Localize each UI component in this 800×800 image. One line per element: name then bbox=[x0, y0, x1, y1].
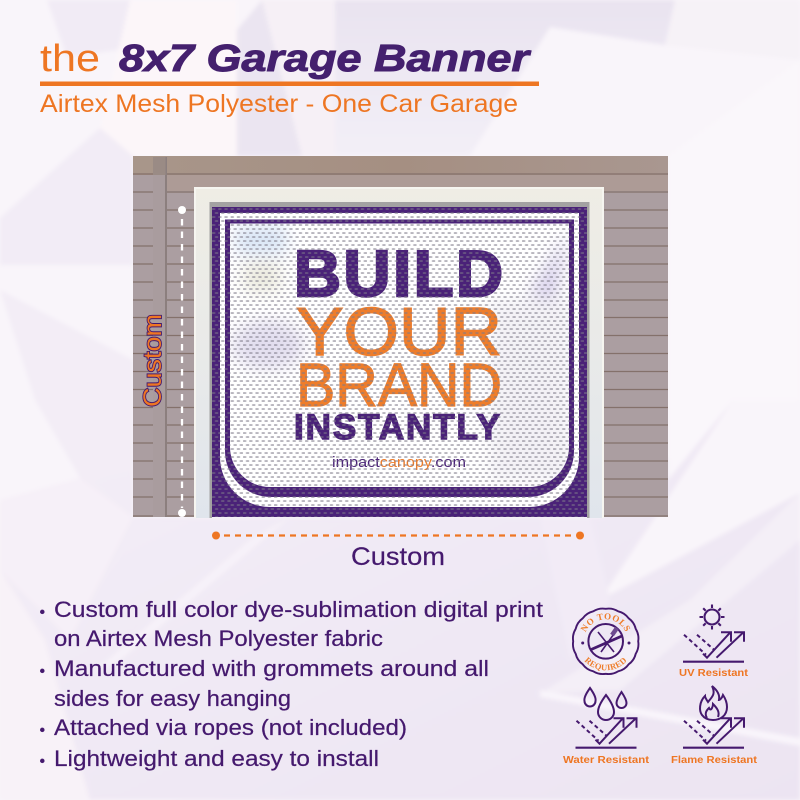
feature bullet list: Attached via ropes (not included) bbox=[54, 715, 407, 740]
title: 8x7 Garage Banner bbox=[119, 38, 532, 80]
feature bullet list: • bbox=[40, 722, 45, 739]
title rule bbox=[40, 82, 539, 86]
icon: no tools required badge: REQUIRED bbox=[584, 656, 626, 671]
faint photo behind mesh bbox=[232, 226, 570, 480]
mesh perforations bbox=[212, 207, 587, 517]
width dimension: Custom bbox=[212, 532, 584, 571]
width dimension: Custom: Custom bbox=[351, 543, 445, 571]
banner text: BRAND bbox=[296, 351, 502, 419]
banner text: BUILD bbox=[294, 237, 503, 310]
icon: flame resistant bbox=[671, 686, 758, 766]
garage photo bbox=[133, 156, 668, 518]
feature bullet list: Custom full color dye-sublimation digital print bbox=[54, 597, 543, 622]
white panel bbox=[230, 224, 569, 487]
icon: UV resistant bbox=[679, 604, 749, 679]
purple inner border bbox=[225, 220, 574, 497]
title: the bbox=[40, 38, 100, 80]
subtitle: Airtex Mesh Polyester - One Car Garage bbox=[40, 90, 518, 118]
feature bullet list: • bbox=[40, 604, 45, 621]
icon: water resistant: Water Resistant bbox=[563, 754, 650, 766]
feature bullet list: on Airtex Mesh Polyester fabric bbox=[54, 626, 383, 651]
mesh banner bbox=[212, 207, 587, 517]
banner text: impactcanopy .com bbox=[332, 454, 466, 471]
height dimension: Custom bbox=[139, 206, 186, 517]
downpipe bbox=[153, 157, 166, 517]
feature bullet list: Manufactured with grommets around all bbox=[54, 656, 489, 681]
water drops bbox=[584, 688, 626, 720]
feature bullet list: sides for easy hanging bbox=[54, 686, 291, 711]
door shadow bbox=[210, 202, 590, 518]
height dimension: Custom: Custom bbox=[139, 314, 167, 407]
siding lines bbox=[133, 174, 668, 516]
icon: UV resistant: UV Resistant bbox=[679, 667, 749, 679]
door trim bbox=[194, 187, 604, 518]
banner text: INSTANTLY bbox=[294, 408, 500, 447]
icon: water resistant bbox=[563, 688, 650, 766]
icon: flame resistant: Flame Resistant bbox=[671, 754, 758, 766]
banner text: YOUR bbox=[296, 294, 502, 370]
white band bbox=[220, 213, 579, 507]
icon: no tools required badge: NO TOOLS bbox=[580, 613, 630, 632]
flame bbox=[700, 686, 727, 720]
feature bullet list: Lightweight and easy to install bbox=[54, 746, 379, 771]
banner text bbox=[294, 237, 503, 471]
upper wall band bbox=[133, 156, 668, 175]
icon: no tools required badge bbox=[572, 608, 640, 675]
sun bbox=[700, 604, 724, 630]
feature bullet list bbox=[40, 597, 543, 771]
feature bullet list: • bbox=[40, 753, 45, 770]
feature bullet list: • bbox=[40, 663, 45, 680]
